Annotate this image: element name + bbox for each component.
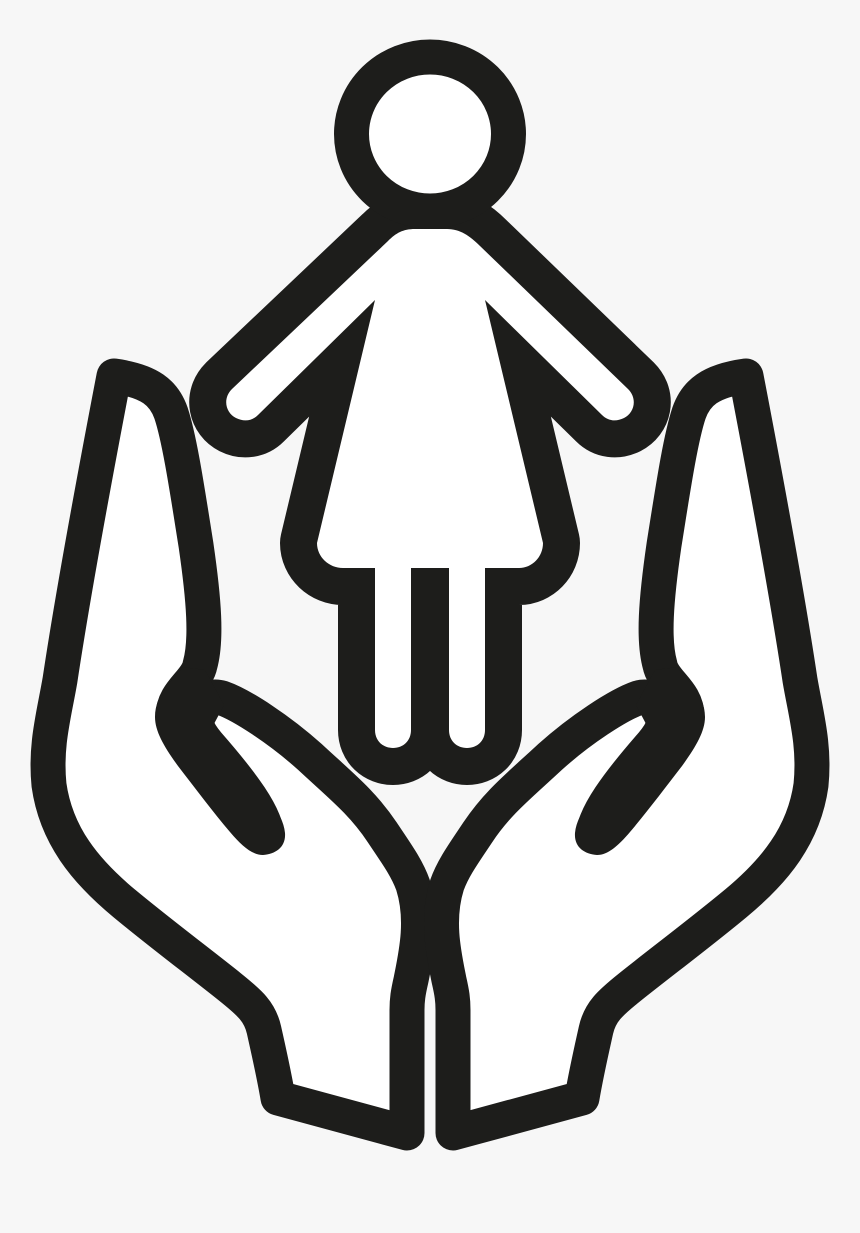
figure head (352, 57, 508, 211)
icon: right hand (441, 376, 812, 1133)
figure outline (226, 229, 634, 748)
icon: left hand (48, 376, 419, 1133)
icon: child figure (226, 57, 634, 748)
figure body (226, 229, 634, 748)
thumb web (155, 667, 285, 855)
thumb web (575, 667, 705, 855)
